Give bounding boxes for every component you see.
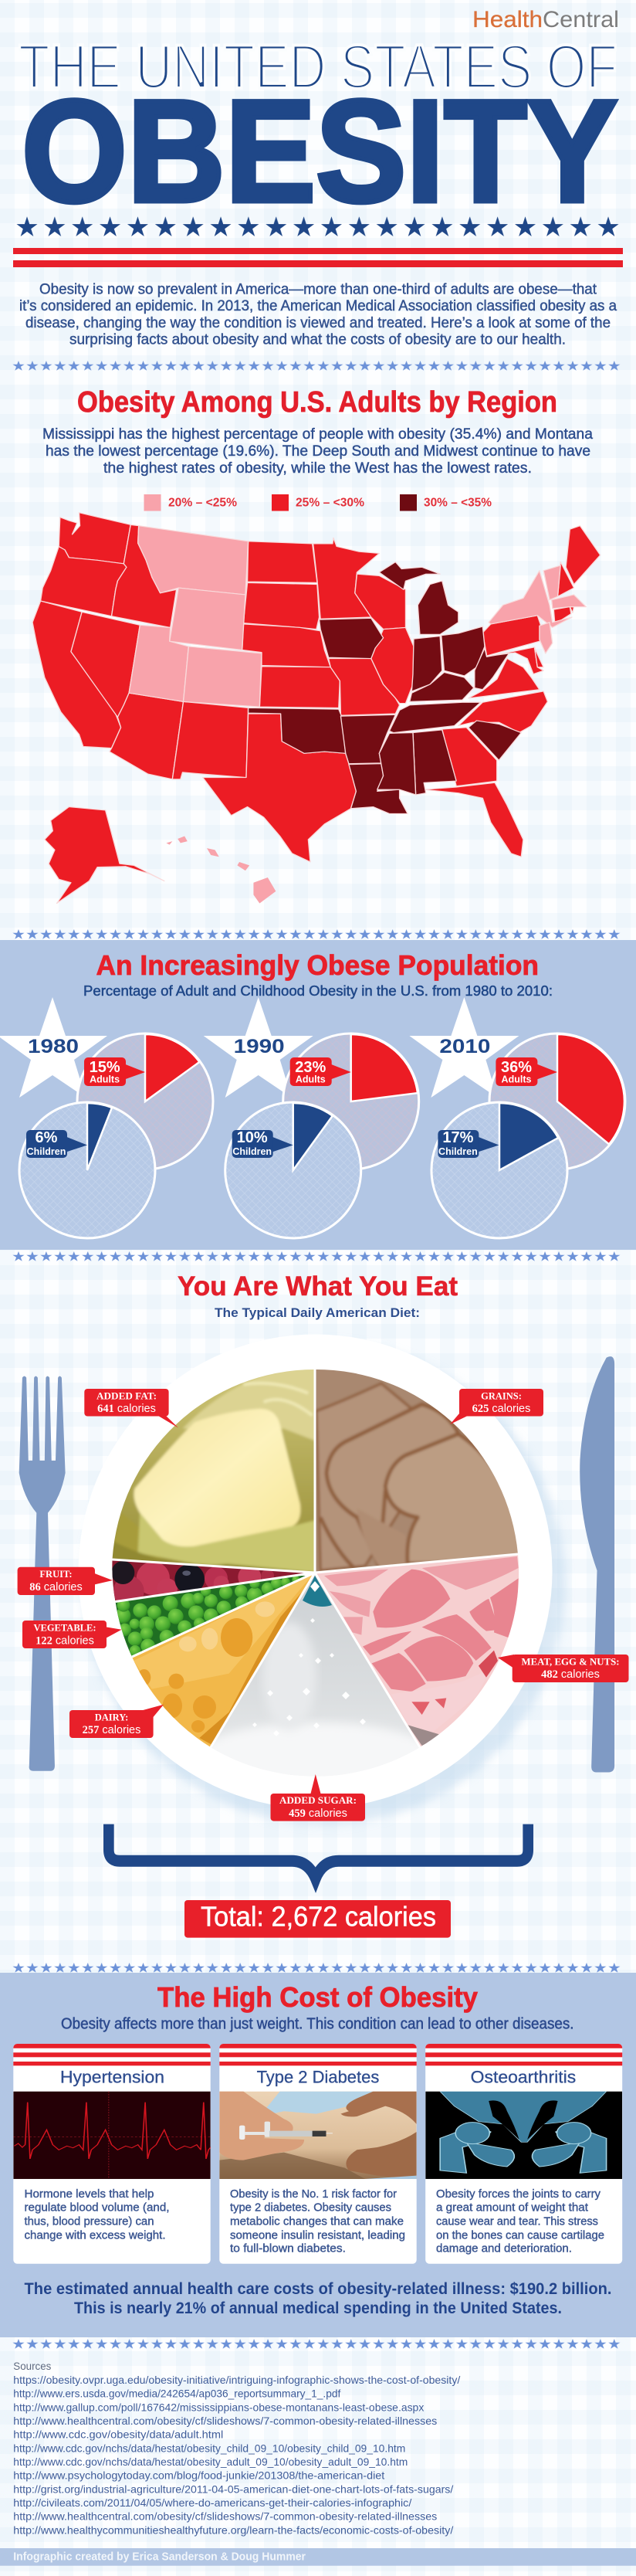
callout: added sugar: 459 calories [289, 1807, 347, 1820]
pie: children 10% [225, 1102, 361, 1238]
callout: vegetable: VEGETABLE: [33, 1622, 96, 1633]
callout: children: Children [438, 1146, 478, 1157]
region description: the highest rates of obesity, while the West has the lowest rates. [103, 460, 532, 477]
map legend [144, 494, 492, 511]
pie group: 1980 [0, 997, 213, 1238]
callout: grains: GRAINS: [481, 1390, 522, 1401]
card title: Hypertension [60, 2068, 164, 2087]
callout: fruit: FRUIT: [39, 1569, 73, 1580]
callout: grains: 625 calories [472, 1403, 530, 1415]
callout: grains [450, 1389, 543, 1424]
image: pelvis x-ray [425, 2092, 622, 2179]
intro text: disease, changing the way the condition is viewed and treated. Here’s a look at some of the [25, 315, 611, 331]
callout: meat, egg and nuts: MEAT, EGG & NUTS: [522, 1657, 619, 1668]
annual cost statement [25, 2280, 611, 2317]
card text: cause wear and tear. This stress [436, 2215, 598, 2228]
card: hypertension [13, 2044, 213, 2264]
population subheading: Percentage of Adult and Childhood Obesity in the U.S. from 1980 to 2010: [83, 983, 553, 999]
callout: children [232, 1129, 293, 1158]
sources: Sources [13, 2360, 51, 2372]
intro text: Obesity is now so prevalent in America—more than one-third of adults are obese—that [39, 281, 597, 298]
sources: http://www.ers.usda.gov/media/242654/ap036_reportsummary_1_.pdf [13, 2388, 340, 2400]
callout: meat, egg and nuts: 482 calories [541, 1668, 600, 1681]
food: fruit [112, 1560, 304, 1602]
card text: regulate blood volume (and, [25, 2201, 170, 2215]
sources: http://www.gallup.com/poll/167642/mississippians-obese-montanans-least-obese.aspx [13, 2401, 424, 2413]
callout: adults: 36% [501, 1059, 532, 1076]
footer credit [0, 2548, 636, 2566]
star divider [12, 1962, 621, 1974]
card text: change with excess weight. [25, 2228, 165, 2242]
pie: adults 15% [77, 1033, 213, 1169]
region description: has the lowest percentage (19.6%). The Deep South and Midwest continue to have [46, 443, 590, 460]
food: grains [316, 1369, 518, 1571]
callout: added sugar [270, 1774, 365, 1821]
callout: adults [84, 1057, 145, 1086]
heading: population: An Increasingly Obese Population [96, 949, 539, 981]
star: 2010 [409, 997, 519, 1098]
callout: vegetable: 122 calories [36, 1635, 94, 1648]
sources: http://www.psychologytoday.com/blog/food-junkie/201308/the-american-diet [13, 2469, 384, 2482]
logo: HealthCentral: Health [472, 7, 543, 32]
callout: adults: Adults [90, 1074, 120, 1084]
sources: http://www.healthycommunitieshealthyfuture.org/learn-the-facts/economic-costs-of-obesity/ [13, 2523, 453, 2536]
card text: a great amount of weight that [436, 2201, 589, 2215]
heading: diet: You Are What You Eat [178, 1271, 458, 1302]
region description [42, 426, 593, 477]
pie group: 2010 [409, 997, 625, 1238]
callout: fruit: 86 calories [29, 1581, 83, 1593]
total calories: Total: 2,672 calories [201, 1901, 436, 1933]
callout: adults: Adults [296, 1074, 326, 1084]
callout: children: 6% [36, 1129, 58, 1146]
map legend: 30% – <35% [424, 496, 492, 510]
intro text: it’s considered an epidemic. In 2013, the American Medical Association classified obesity as a [19, 298, 617, 314]
callout: added sugar: ADDED SUGAR: [279, 1795, 357, 1806]
callout: vegetable [22, 1621, 122, 1648]
pie group: 1990 [204, 997, 419, 1238]
card text: someone insulin resistant, leading [230, 2228, 405, 2242]
callout: adults: 23% [295, 1059, 326, 1076]
logo: HealthCentral [472, 7, 619, 32]
panel: increasingly obese population [0, 940, 636, 1250]
map legend: 25% – <30% [296, 496, 364, 510]
bracket [109, 1824, 528, 1879]
card text [230, 2187, 405, 2255]
pie: children 6% [19, 1102, 155, 1238]
card text: Obesity forces the joints to carry [436, 2187, 600, 2201]
panel: obesity by region [32, 386, 600, 904]
card text [436, 2187, 604, 2255]
food: added fat [113, 1369, 313, 1571]
card: osteoarthritis [425, 2044, 622, 2264]
callout: dairy: 257 calories [83, 1724, 140, 1736]
card: type 2 diabetes [219, 2044, 417, 2264]
callout: children: 10% [237, 1129, 268, 1146]
year: 2010: 2010 [439, 1036, 490, 1057]
callout: children [26, 1129, 87, 1158]
star divider [12, 2339, 621, 2350]
callout: added fat: 641 calories [97, 1403, 156, 1415]
callout: fruit [18, 1567, 113, 1595]
icon: fork [19, 1376, 66, 1771]
star divider [12, 928, 621, 941]
star divider [12, 360, 621, 372]
red double rule [13, 248, 623, 267]
card title: Type 2 Diabetes [257, 2068, 379, 2087]
food: added sugar [211, 1575, 418, 1777]
card text: metabolic changes that can make [230, 2215, 404, 2228]
card text [25, 2187, 170, 2242]
pie: adults 23% [283, 1033, 419, 1169]
callout: added fat: ADDED FAT: [96, 1390, 157, 1401]
icon: knife [580, 1356, 614, 1772]
cost subheading: Obesity affects more than just weight. This condition can lead to other diseases. [61, 2016, 574, 2033]
region description: Mississippi has the highest percentage of people with obesity (35.4%) and Montana [42, 426, 593, 443]
annual cost statement: The estimated annual health care costs of obesity-related illness: $190.2 billion. [25, 2280, 611, 2298]
callout: adults: Adults [502, 1074, 531, 1084]
callout: adults [290, 1057, 351, 1086]
card text: to full-blown diabetes. [230, 2242, 346, 2255]
callout: adults [496, 1057, 557, 1086]
callout: dairy: DAIRY: [95, 1712, 128, 1722]
sources: http://grist.org/industrial-agriculture/2011-04-05-american-diet-one-chart-lots-of-fats-sugars/ [13, 2483, 453, 2495]
sources: http://www.cdc.gov/nchs/data/hestat/obesity_child_09_10/obesity_child_09_10.htm [13, 2442, 405, 2454]
food: vegetable [116, 1576, 306, 1657]
intro text [19, 281, 617, 348]
sources: http://www.healthcentral.com/obesity/cf/slideshows/7-common-obesity-related-illnesses [13, 2510, 437, 2523]
callout: children [438, 1129, 499, 1158]
sources: http://www.cdc.gov/obesity/data/adult.html [13, 2428, 223, 2441]
map legend: 20% – <25% [168, 496, 237, 510]
year: 1990: 1990 [234, 1036, 285, 1057]
card text: thus, blood pressure) can [25, 2215, 154, 2228]
callout: children: 17% [442, 1129, 474, 1146]
star row: large [13, 216, 622, 239]
food: dairy [132, 1576, 312, 1747]
logo: HealthCentral: Central [543, 7, 619, 32]
callout: children: Children [27, 1146, 66, 1157]
star divider [12, 1251, 621, 1262]
year: 1980: 1980 [28, 1036, 79, 1057]
card text: type 2 diabetes. Obesity causes [230, 2201, 391, 2215]
sources: http://civileats.com/2011/04/05/where-do-americans-get-their-calories-infographic/ [13, 2496, 411, 2509]
card text: damage and deterioration. [436, 2242, 572, 2255]
heading: cost: The High Cost of Obesity [157, 1981, 478, 2013]
callout: dairy [69, 1705, 164, 1738]
diet subheading: The Typical Daily American Diet: [215, 1305, 420, 1320]
annual cost statement: This is nearly 21% of annual medical spending in the United States. [74, 2299, 562, 2317]
card text: on the bones can cause cartilage [436, 2228, 604, 2242]
food: meat, egg and nuts [316, 1556, 519, 1747]
callout: children: Children [232, 1146, 272, 1157]
star: 1990 [204, 997, 313, 1098]
pie: adults 36% [489, 1033, 625, 1169]
callout: adults: 15% [90, 1059, 120, 1076]
card text: Obesity is the No. 1 risk factor for [230, 2187, 397, 2201]
callout: meat, egg and nuts [498, 1655, 628, 1682]
callout: added fat [84, 1389, 178, 1427]
sources: http://www.healthcentral.com/obesity/cf/slideshows/7-common-obesity-related-illnesses [13, 2415, 437, 2427]
intro text: surprising facts about obesity and what the costs of obesity are to our health. [69, 332, 566, 348]
sources [13, 2360, 460, 2536]
card text: Hormone levels that help [25, 2187, 154, 2201]
sources: https://obesity.ovpr.uga.edu/obesity-initiative/intriguing-infographic-shows-the-cost-of-obesity/ [13, 2374, 460, 2386]
choropleth map of the United States [32, 513, 600, 904]
star: 1980 [0, 997, 107, 1098]
image: ECG trace [13, 2092, 213, 2179]
pie: children 17% [431, 1102, 567, 1238]
card title: Osteoarthritis [471, 2068, 576, 2087]
sources: http://www.cdc.gov/nchs/data/hestat/obesity_adult_09_10/obesity_adult_09_10.htm [13, 2456, 408, 2468]
image: insulin injection [219, 2092, 417, 2179]
panel: the high cost of obesity [0, 1973, 636, 2337]
wedge separators [113, 1369, 518, 1747]
panel: you are what you eat [18, 1271, 629, 1938]
footer credit: Infographic created by Erica Sanderson & Doug Hummer [13, 2551, 306, 2563]
heading: region: Obesity Among U.S. Adults by Region [77, 386, 557, 419]
plate with food wedges [79, 1335, 565, 1824]
